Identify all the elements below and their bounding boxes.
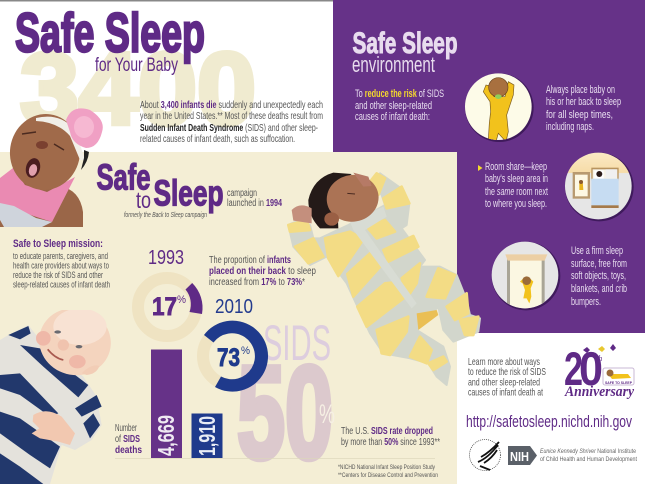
donut chart: 1993 17%: 1993	[148, 247, 184, 269]
text: proportion of infants on backs: increased from 17% to 73%*	[209, 276, 305, 288]
heading: safe to sleep	[96, 156, 224, 214]
text: SIDS rate dropped: The U.S. SIDS rate dropped	[341, 425, 433, 437]
title: Safe Sleep	[15, 2, 205, 64]
footnotes: *NICHD National Infant Sleep Position Study	[338, 464, 436, 471]
text: back to sleep: including naps.	[546, 121, 594, 133]
text: SIDS rate dropped: by more than 50% since 1993**	[341, 436, 440, 448]
mission text	[13, 238, 110, 290]
photo: smiling baby in striped shirt	[0, 310, 111, 484]
environment heading	[352, 27, 458, 77]
donut chart: 2010 73%: 73	[217, 344, 240, 372]
arrow bullet	[478, 165, 482, 171]
mission text: Safe to Sleep mission:	[13, 238, 103, 250]
text: room share	[478, 161, 548, 210]
footnotes	[338, 464, 438, 479]
mission text: to educate parents, caregivers, and	[13, 251, 108, 261]
donut chart: 2010 73%: 2010	[215, 296, 253, 318]
intro paragraph: year in the United States.** Most of these deaths result from	[140, 110, 323, 122]
formerly note: formerly the Back to Sleep campaign	[124, 210, 207, 219]
text: room share: Room share—keep	[485, 161, 547, 173]
text: room share: baby's sleep area in	[485, 173, 548, 185]
logo: 20th anniversary: 2	[564, 342, 583, 395]
campaign launch note: campaign	[227, 188, 257, 199]
learn more text	[468, 356, 546, 398]
logo: NIH	[508, 446, 637, 465]
title	[15, 2, 205, 76]
mission text: health care providers about ways to	[13, 260, 109, 270]
donut chart: 1993 17%: %	[177, 294, 186, 306]
text: room share: the same room next	[485, 186, 548, 198]
bar chart: SIDS deaths	[151, 350, 222, 458]
bar: 1,910: 1,910	[194, 416, 220, 456]
icon: empty firm crib	[492, 242, 560, 312]
text: SIDS rate dropped	[341, 425, 440, 448]
intro paragraph: related causes of infant death, such as suffocation.	[140, 133, 295, 145]
logo: NIH: NIH	[510, 449, 529, 464]
learn more text: and other sleep-related	[468, 376, 540, 388]
logo: 20th anniversary: 0	[579, 342, 603, 395]
donut chart: 1993 17%	[138, 247, 203, 336]
environment intro	[355, 88, 444, 123]
learn more text: Learn more about ways	[468, 356, 540, 368]
photo: sleeping baby in yellow and grey striped onesie	[288, 171, 480, 385]
donut chart: 2010 73%: %	[241, 345, 250, 357]
heading: safe to sleep: Sleep	[154, 172, 224, 214]
big number 50 percent: %	[319, 399, 335, 429]
panel: safe sleep environment background	[333, 0, 645, 333]
logo: 20th anniversary	[564, 342, 634, 400]
heading: safe to sleep: Safe	[96, 156, 150, 198]
environment intro: and other sleep-related	[355, 100, 432, 112]
text: firm sleep surface	[571, 245, 627, 308]
intro paragraph: About 3,400 infants die suddenly and unexpectedly each	[140, 99, 323, 111]
panel: safe to sleep campaign background	[0, 152, 457, 484]
environment heading: environment	[352, 52, 435, 77]
text: back to sleep	[546, 84, 621, 133]
heading: safe to sleep: to	[136, 187, 151, 213]
text: proportion of infants on backs: The proportion of infants	[209, 254, 291, 266]
text: firm sleep surface: bumpers.	[571, 296, 601, 308]
icon: room with crib and bed	[565, 153, 634, 221]
logo: HHS	[470, 440, 500, 470]
campaign launch note: launched in 1994	[227, 198, 282, 209]
big number 3400: 3400	[20, 32, 256, 146]
logo: 20th anniversary: th	[596, 354, 602, 363]
big number 50 percent	[237, 339, 335, 484]
icon: baby on back	[465, 73, 534, 142]
intro paragraph: Sudden Infant Death Syndrome (SIDS) and other sleep-	[140, 122, 318, 134]
donut chart: 1993 17%: 17	[152, 293, 177, 321]
logo: 20th anniversary: Anniversary	[564, 384, 634, 400]
text: back to sleep: for all sleep times,	[546, 109, 613, 121]
footnotes: **Centers for Disease Control and Prevention	[338, 472, 438, 479]
bar: 4,669: 4,669	[153, 415, 179, 456]
text: proportion of infants on backs	[209, 254, 316, 288]
environment intro: To reduce the risk of SIDS	[355, 88, 444, 100]
learn more text: causes of infant death at	[468, 386, 543, 398]
SIDS label: SIDS	[263, 315, 331, 371]
title: for Your Baby	[95, 55, 178, 76]
text: proportion of infants on backs: placed on their back to sleep	[209, 265, 316, 277]
donut chart: 2010 73%	[203, 296, 268, 392]
environment heading: Safe Sleep	[352, 27, 458, 60]
photo: yawning baby with pink headband	[0, 108, 103, 227]
text: room share: to where you sleep.	[485, 198, 547, 210]
mission text: sleep-related causes of infant death	[13, 280, 110, 290]
mission text: reduce the risk of SIDS and other	[13, 270, 103, 280]
logo: 20th anniversary: SAFE TO SLEEP	[605, 381, 632, 385]
logo: NIH: Eunice Kennedy Shriver National Institute	[540, 448, 636, 455]
big number 50 percent: 50	[237, 339, 333, 484]
bar chart caption: of SIDS	[115, 433, 140, 445]
environment intro: causes of infant death:	[355, 111, 430, 123]
bar chart caption: deaths	[115, 444, 142, 456]
intro paragraph	[140, 99, 323, 145]
learn more text: to reduce the risk of SIDS	[468, 366, 546, 378]
campaign launch note	[227, 188, 282, 209]
bar chart caption: Number	[115, 422, 137, 434]
bar chart caption	[115, 422, 142, 456]
